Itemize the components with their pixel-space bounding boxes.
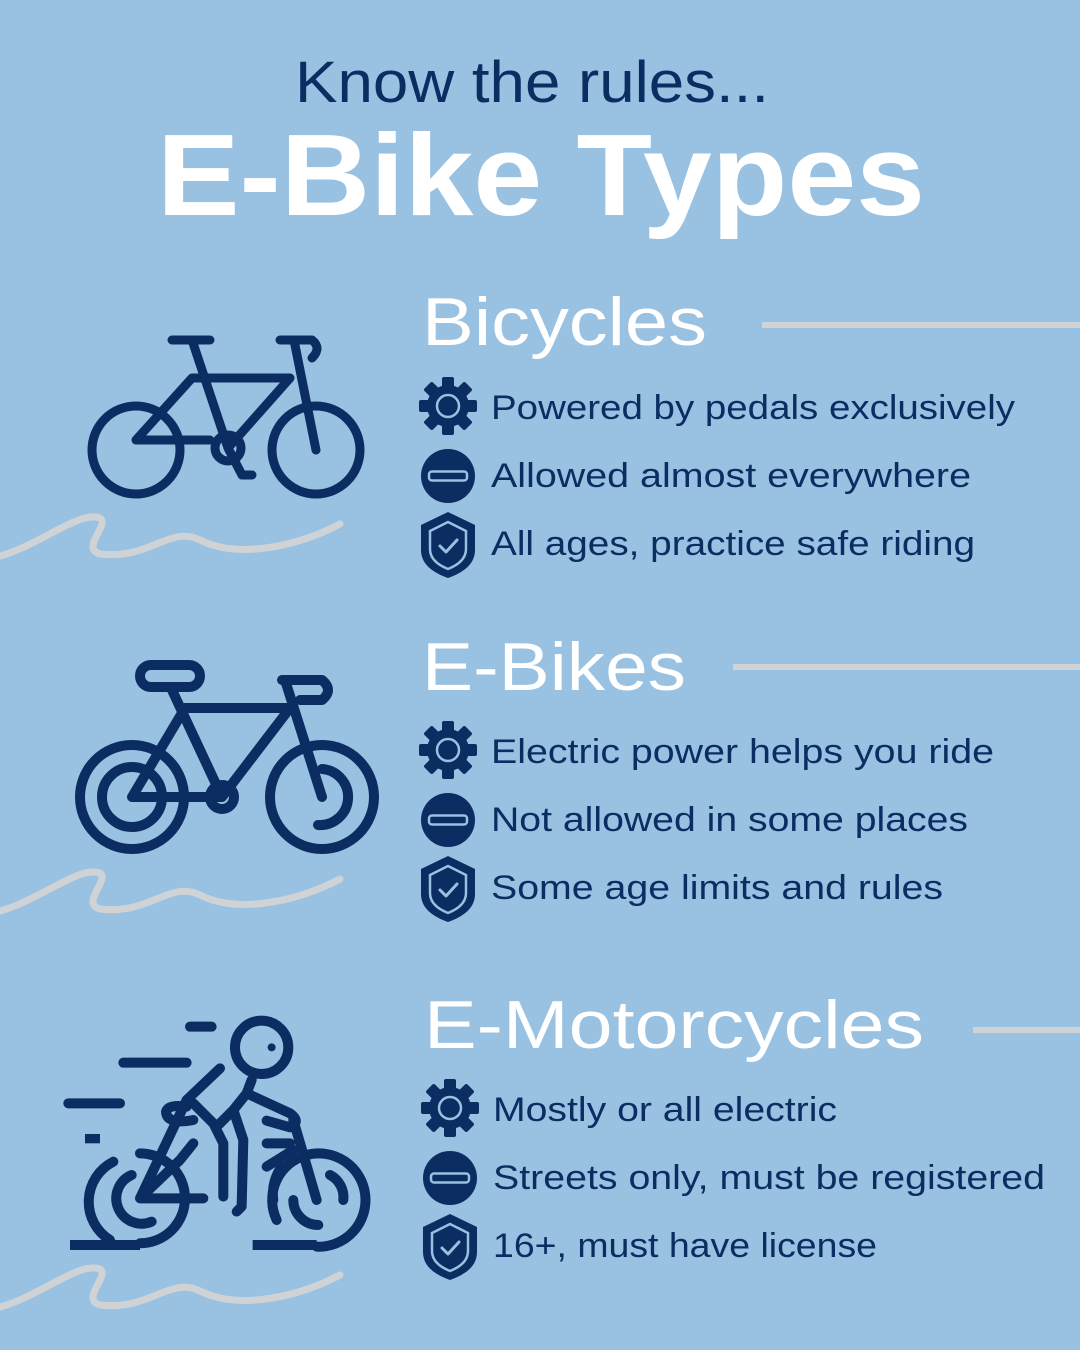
item: powered by pedals: Powered by pedals exclusively <box>491 389 1015 427</box>
item: mostly electric <box>421 1079 837 1137</box>
squiggle <box>0 517 340 556</box>
item: electric power <box>419 721 994 779</box>
item: streets only <box>423 1151 1045 1205</box>
heading: E-Motorcycles: E-Motorcycles <box>424 987 924 1063</box>
item: powered by pedals <box>419 377 1015 435</box>
item: 16+ license <box>423 1214 877 1280</box>
heading: E-Bikes: E-Bikes <box>422 629 686 705</box>
item: all ages: All ages, practice safe riding <box>491 525 975 563</box>
item: 16+ license: 16+, must have license <box>493 1227 877 1265</box>
heading: Bicycles: Bicycles <box>422 284 707 360</box>
icon: e-motorcycle rider <box>68 1021 365 1247</box>
item: age limits: Some age limits and rules <box>491 869 943 907</box>
item: allowed almost everywhere: Allowed almost everywhere <box>491 457 971 495</box>
title: Know the rules: Know the rules... <box>295 50 769 115</box>
squiggle <box>0 1268 340 1307</box>
item: age limits <box>421 856 943 922</box>
item: mostly electric: Mostly or all electric <box>493 1091 837 1129</box>
panel: bicycles <box>0 284 1080 578</box>
icon: bicycle <box>92 340 360 494</box>
panel: e-motorcycles <box>0 987 1080 1307</box>
item: streets only: Streets only, must be registered <box>493 1159 1045 1197</box>
panel: e-bikes <box>0 629 1080 922</box>
squiggle <box>0 872 340 911</box>
item: electric power: Electric power helps you ride <box>491 733 994 771</box>
item: not allowed: Not allowed in some places <box>491 801 968 839</box>
item: allowed almost everywhere <box>421 449 971 503</box>
title: E-Bike Types: E-Bike Types <box>157 110 925 240</box>
item: not allowed <box>421 793 968 847</box>
icon: e-bike <box>80 665 374 849</box>
item: all ages <box>421 512 975 578</box>
